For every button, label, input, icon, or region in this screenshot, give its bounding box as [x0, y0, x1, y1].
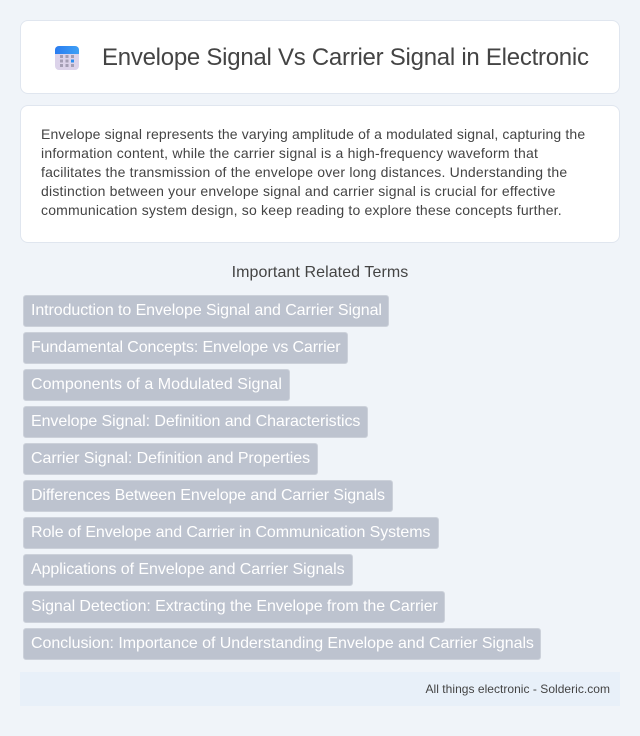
- tag 2: [23, 332, 348, 364]
- panel: intro text: [20, 105, 620, 243]
- tag 6: [23, 480, 393, 512]
- text block: intro paragraph: communication system design, so keep reading to explore these concepts further.: [41, 202, 562, 218]
- text block: intro paragraph: distinction between your envelope signal and carrier signal is crucial for effective: [41, 183, 556, 199]
- heading: related terms: Important Related Terms: [232, 264, 408, 281]
- tag 6: Differences Between Envelope and Carrier Signals: [31, 487, 385, 504]
- title: Envelope Signal Vs Carrier Signal in Electronic: [102, 44, 589, 71]
- tag 9: [23, 591, 445, 623]
- tag 4: Envelope Signal: Definition and Characteristics: [31, 413, 360, 430]
- text block: intro paragraph: Envelope signal represents the varying amplitude of a modulated signal, capturing the: [41, 126, 585, 142]
- tag 7: Role of Envelope and Carrier in Communication Systems: [31, 524, 430, 541]
- footer: [20, 672, 620, 706]
- tag 9: Signal Detection: Extracting the Envelope from the Carrier: [31, 598, 438, 615]
- tag 1: Introduction to Envelope Signal and Carrier Signal: [31, 302, 382, 319]
- text block: intro paragraph: information content, while the carrier signal is a high-frequency waveform that: [41, 145, 538, 161]
- tag 10: [23, 628, 541, 660]
- tag 5: Carrier Signal: Definition and Properties: [31, 450, 310, 467]
- tag list: [23, 295, 541, 660]
- tag 8: [23, 554, 353, 586]
- tag 7: [23, 517, 439, 549]
- tag 10: Conclusion: Importance of Understanding Envelope and Carrier Signals: [31, 635, 534, 652]
- tag 4: [23, 406, 368, 438]
- footer: All things electronic - Solderic.com: [426, 682, 610, 696]
- tag 5: [23, 443, 318, 475]
- tag 1: [23, 295, 389, 327]
- tag 3: [23, 369, 290, 401]
- text block: intro paragraph: [41, 126, 585, 218]
- tag 8: Applications of Envelope and Carrier Signals: [31, 561, 345, 578]
- tag 3: Components of a Modulated Signal: [31, 376, 282, 393]
- tag 2: Fundamental Concepts: Envelope vs Carrier: [31, 339, 340, 356]
- panel: title card: [20, 20, 620, 94]
- text block: intro paragraph: facilitates the transmission of the envelope over long distances. Understanding the: [41, 164, 567, 180]
- icon: calendar: [55, 46, 79, 70]
